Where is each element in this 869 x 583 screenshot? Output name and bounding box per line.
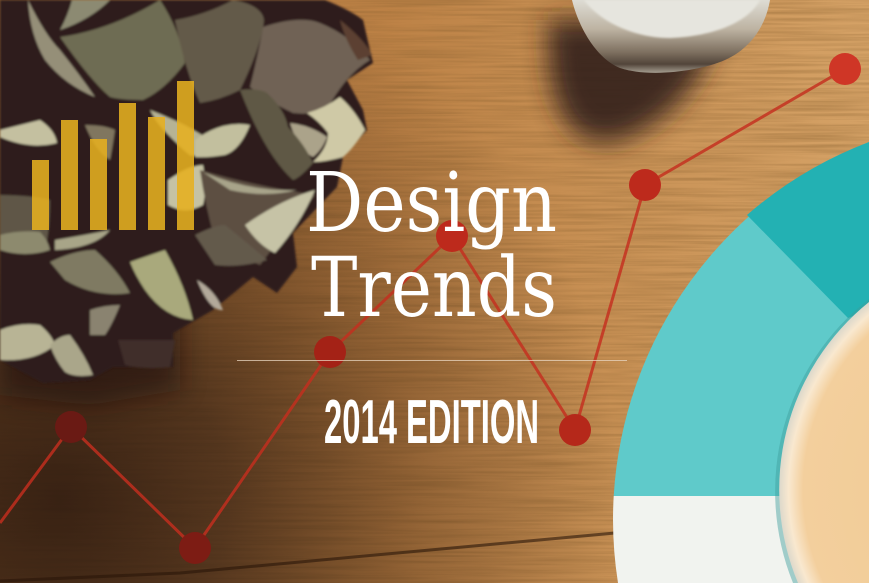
coffee cup with foam [775, 299, 869, 583]
plant dark body [0, 0, 373, 383]
title: Trends [311, 241, 557, 336]
plate segment: dark teal [747, 142, 869, 318]
coffee cup shadow [548, 20, 720, 142]
hydrangea plant [0, 0, 373, 383]
title [306, 156, 557, 336]
plate [613, 142, 869, 583]
glass cup at top [572, 0, 770, 73]
logo: bar chart icon [32, 81, 194, 230]
subtitle: 2014 EDITION [324, 388, 539, 457]
petals [60, 0, 185, 100]
plate segment: white [613, 496, 869, 583]
trend line [0, 69, 845, 548]
divider [237, 360, 627, 361]
plate segment: light teal [614, 142, 869, 496]
title: Design [306, 156, 557, 251]
plant shadow [0, 300, 180, 405]
